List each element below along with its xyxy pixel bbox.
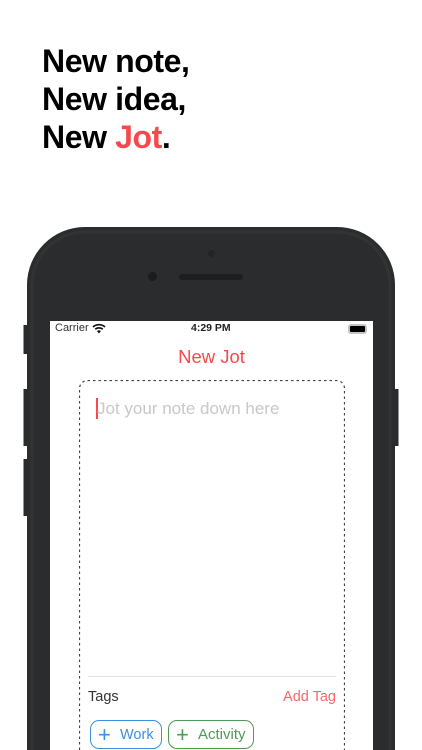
heading: New note, [42,43,190,79]
tag: work: + [98,722,111,746]
tag: work: Work [120,727,154,743]
tags label: Tags [88,689,119,705]
phone mockup [24,227,398,750]
status bar time: 4:29 PM [191,322,231,334]
heading [42,43,190,155]
icon: wifi [92,324,106,334]
tag: work [90,720,162,749]
text cursor [96,398,98,419]
side buttons [24,325,398,516]
placeholder text: Jot your note down here [97,399,279,418]
screen title: New Jot [178,346,245,367]
speaker [179,274,243,280]
tag: activity: Activity [198,726,246,743]
tag: activity [168,720,254,749]
phone body [27,227,395,750]
front camera [148,272,157,281]
heading: New idea, [42,81,186,117]
icon: battery [348,324,367,334]
heading: New Jot. [42,119,170,155]
tag: activity: + [176,722,189,746]
proximity sensor [208,250,214,256]
screen [50,321,373,750]
divider [88,676,336,677]
note card [79,380,345,750]
add tag link: Add Tag [283,689,336,705]
status bar carrier: Carrier [55,322,89,334]
